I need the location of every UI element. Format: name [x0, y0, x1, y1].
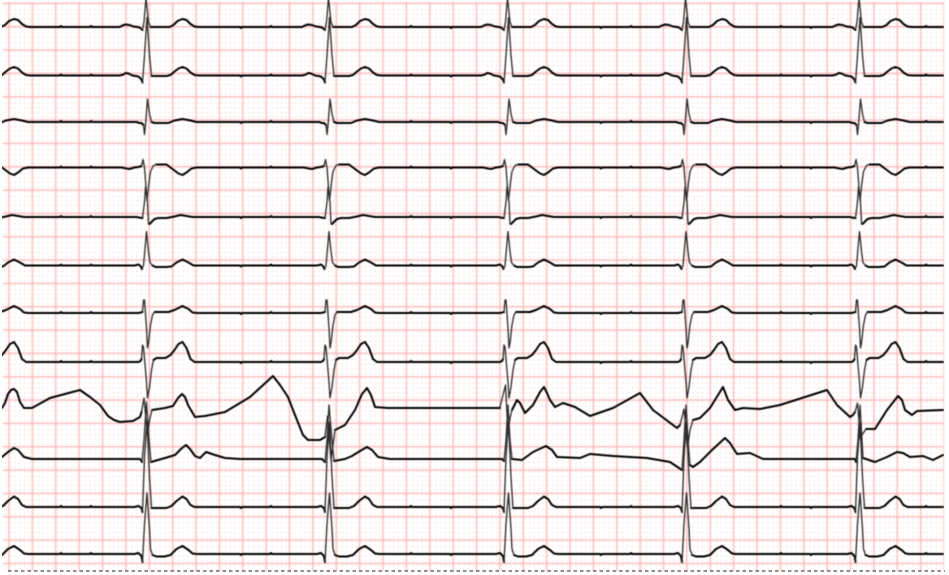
- lead 4 trace: [0, 160, 943, 200]
- lead 9 trace with wandering baseline: [2, 376, 943, 460]
- lead 10 trace with wandering baseline: [2, 402, 943, 470]
- lead 5 trace: [0, 187, 943, 224]
- lead 8 trace: [0, 342, 943, 398]
- lead 7 trace: [0, 300, 943, 348]
- lead 11 trace: [0, 422, 943, 512]
- lead 2 trace: [0, 18, 943, 82]
- lead 1 trace: [0, 0, 943, 30]
- lead 3 trace: [0, 99, 943, 134]
- dashed bottom rule: [8, 570, 945, 572]
- lead 6 trace: [0, 232, 943, 269]
- lead 12 trace: [0, 493, 943, 562]
